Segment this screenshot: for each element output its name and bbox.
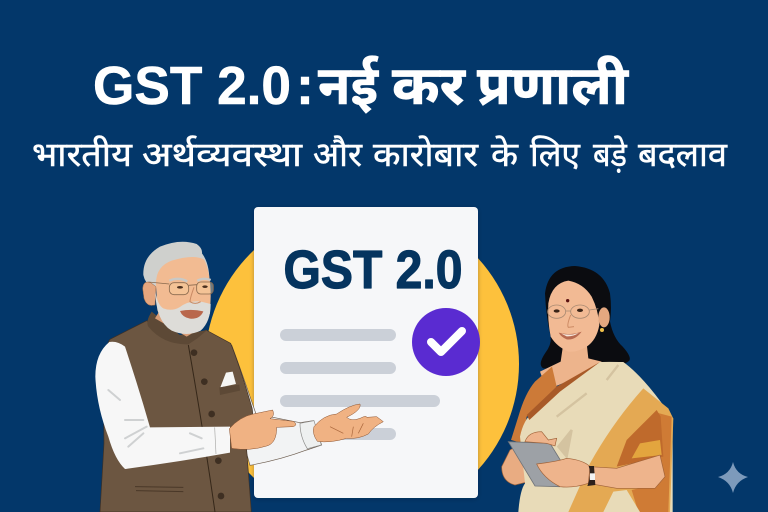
saree: [518, 362, 673, 512]
face: [548, 281, 599, 352]
ear: [143, 282, 156, 305]
woman with tablet: [502, 266, 673, 512]
pointing hand: [229, 410, 296, 449]
saree fold shading: [557, 365, 618, 457]
text line 1: [280, 329, 396, 341]
eyebrows: [169, 279, 211, 281]
watch: [587, 466, 595, 486]
icon: sparkle: [718, 462, 748, 493]
glasses: [148, 282, 213, 295]
nose: [568, 315, 574, 327]
beard: [155, 290, 211, 334]
sleeve border: [632, 440, 662, 458]
open hand: [313, 404, 383, 442]
far arm: [502, 440, 528, 485]
subtitle: के: [491, 135, 519, 174]
subtitle: भारतीय: [32, 136, 133, 174]
near sleeve: [95, 342, 230, 469]
blouse: [511, 367, 557, 443]
vest buttons: [191, 349, 224, 499]
neck: [155, 310, 203, 337]
subtitle: लिए: [530, 136, 581, 174]
title: कर: [392, 56, 466, 116]
card heading: GST 2.0: [284, 240, 462, 300]
neck and chest: [540, 343, 602, 390]
text line 2: [280, 362, 396, 374]
tablet: [508, 442, 563, 487]
near arm: [588, 455, 665, 488]
title: :: [296, 56, 314, 116]
man presenting: [95, 242, 383, 512]
lower hand: [537, 458, 590, 487]
bindi: [566, 299, 569, 302]
subtitle: बदलाव: [638, 136, 728, 174]
far sleeve: [232, 345, 322, 465]
face: [156, 257, 211, 333]
inner cream panel: [603, 490, 640, 512]
title: GST 2.0: [93, 56, 291, 116]
eyes: [554, 309, 583, 313]
icon: check badge: [412, 308, 480, 376]
ear and earring: [598, 307, 610, 332]
subtitle: कारोबार: [373, 136, 479, 174]
hair: [143, 242, 209, 290]
title: नई: [318, 55, 379, 116]
document card: [254, 207, 478, 498]
vest: [100, 321, 253, 512]
smile: [559, 332, 582, 340]
text line 3: [280, 395, 440, 407]
pocket square: [220, 372, 236, 387]
yellow circle: [208, 250, 519, 478]
back hair: [541, 266, 630, 368]
pallu side: [632, 413, 672, 512]
sleeve fold: [617, 410, 663, 467]
subtitle: बड़े: [593, 135, 628, 174]
glasses: [548, 305, 598, 318]
mouth: [180, 310, 203, 319]
eyes: [177, 285, 208, 289]
subtitle: और: [313, 136, 363, 174]
cuff: [300, 421, 321, 449]
saree border: [568, 388, 673, 512]
nose: [190, 287, 201, 303]
fingers: [525, 432, 557, 446]
subtitle: अर्थव्यवस्था: [142, 135, 303, 174]
text line 4: [280, 428, 396, 440]
collar: [147, 312, 207, 344]
title: प्रणाली: [477, 55, 629, 116]
